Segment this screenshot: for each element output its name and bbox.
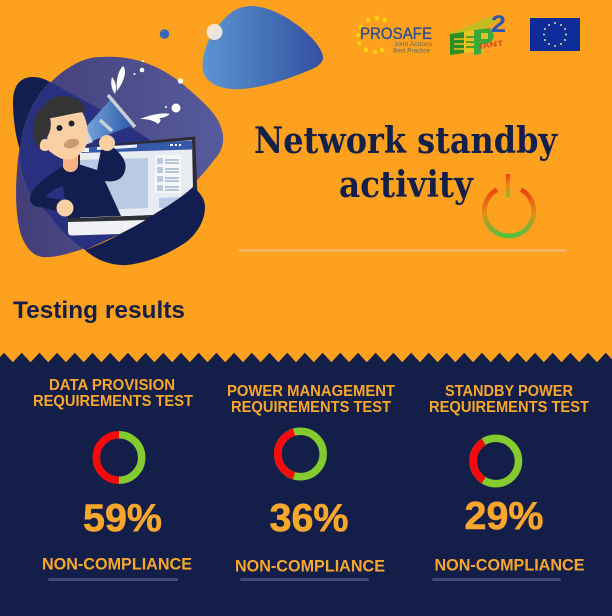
title	[254, 120, 558, 206]
column heading: DATA PROVISION	[49, 377, 175, 394]
label underline	[432, 578, 561, 581]
illustration: man with megaphone and laptop	[13, 57, 223, 265]
column: power management	[227, 383, 395, 581]
man eyes and mouth	[56, 120, 80, 150]
logo: EEPLIANT2	[450, 11, 506, 55]
man face	[39, 112, 88, 160]
title divider	[238, 249, 566, 252]
man hands	[56, 135, 115, 216]
logo: PROSAFE: PROSAFE	[360, 24, 432, 43]
man body	[30, 147, 126, 218]
column: standby power	[429, 383, 589, 581]
logo: EEPLIANT2: IANT	[479, 38, 505, 51]
label underline	[240, 578, 369, 581]
title: activity	[339, 164, 474, 206]
dark foreground blob	[85, 187, 205, 265]
column heading: POWER MANAGEMENT	[227, 383, 395, 400]
percentage: 59%	[83, 497, 162, 540]
icon: power symbol	[484, 174, 534, 236]
column heading	[227, 383, 395, 416]
column heading	[33, 377, 193, 410]
label: NON-COMPLIANCE	[235, 556, 385, 576]
sound splashes	[111, 60, 183, 124]
megaphone	[79, 95, 135, 145]
label: NON-COMPLIANCE	[42, 554, 192, 574]
title: Network standby	[254, 120, 558, 162]
column heading: STANDBY POWER	[445, 383, 573, 400]
donut chart 59%	[96, 435, 142, 480]
heading: testing results: Testing results	[13, 297, 185, 324]
donut chart 36%	[278, 431, 323, 477]
decorative blue blob	[160, 6, 323, 89]
donut chart 29%	[473, 438, 518, 484]
column heading: REQUIREMENTS TEST	[33, 393, 193, 410]
column: data provision	[33, 377, 193, 581]
column heading: REQUIREMENTS TEST	[231, 399, 391, 416]
column heading: REQUIREMENTS TEST	[429, 399, 589, 416]
panel: results	[0, 353, 612, 616]
laptop screen	[68, 136, 198, 219]
logo: EU flag	[530, 18, 580, 51]
laptop base	[68, 215, 153, 236]
label underline	[48, 578, 178, 581]
label: NON-COMPLIANCE	[434, 556, 584, 574]
man hair	[33, 96, 85, 148]
column heading	[429, 383, 589, 416]
logo: PROSAFE: Best Practice	[393, 48, 430, 54]
logo: EEPLIANT2: 2	[491, 11, 506, 38]
man neck	[63, 152, 78, 172]
percentage: 36%	[270, 497, 348, 540]
percentage: 29%	[464, 495, 544, 538]
logo: PROSAFE	[356, 16, 433, 54]
logo: PROSAFE: Joint Actions	[394, 41, 433, 48]
